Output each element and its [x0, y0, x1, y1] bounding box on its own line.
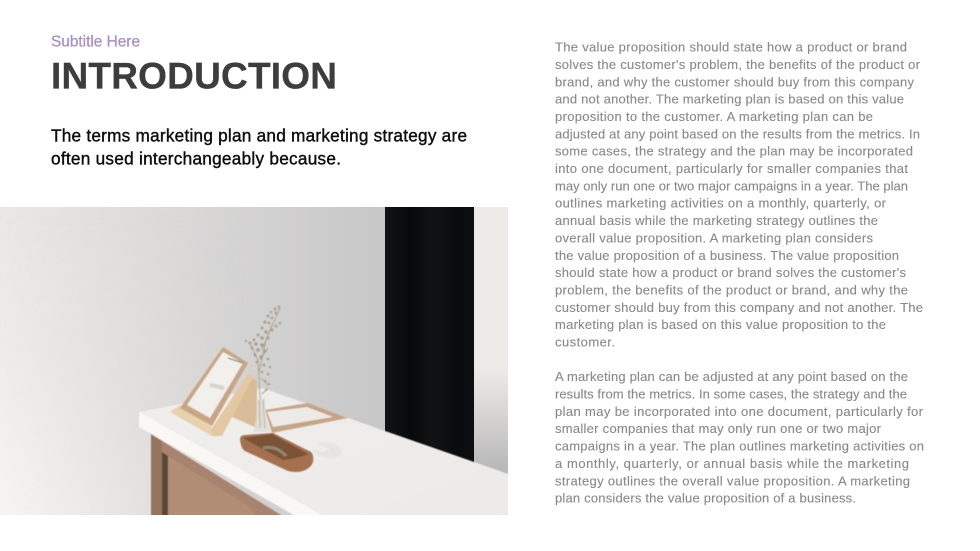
body text: first paragraph: solves the customer's problem, the benefits of the product or: [555, 57, 921, 72]
body text: first paragraph: proposition to the customer. A marketing plan can be: [555, 109, 873, 124]
body text: second paragraph: A marketing plan can be adjusted at any point based on the: [555, 369, 908, 384]
lead statement: [51, 126, 467, 169]
title: INTRODUCTION: [51, 55, 337, 96]
photo wall: [0, 207, 385, 515]
body text: first paragraph: outlines marketing activities on a monthly, quarterly, or: [555, 196, 887, 211]
body text: second paragraph: smaller companies that may only run one or two major: [555, 421, 882, 436]
body text: first paragraph: into one document, particularly for smaller companies that: [555, 161, 908, 176]
body text: first paragraph: [555, 40, 923, 349]
photo black curtain: [385, 207, 474, 467]
body text: first paragraph: and not another. The marketing plan is based on this value: [555, 92, 904, 107]
body text: first paragraph: annual basis while the marketing strategy outlines the: [555, 213, 878, 228]
lead statement: often used interchangeably because.: [51, 149, 341, 169]
subtitle: Subtitle Here: [51, 34, 140, 50]
body text: second paragraph: plan considers the value proposition of a business.: [555, 491, 856, 506]
body text: first paragraph: The value proposition should state how a product or brand: [555, 40, 907, 55]
photo wooden tray: [240, 433, 343, 472]
body text: first paragraph: customer.: [555, 334, 615, 350]
body text: second paragraph: a monthly, quarterly, or annual basis while the marketing: [555, 456, 909, 471]
body text: first paragraph: brand, and why the customer should buy from this company: [555, 74, 914, 89]
body text: first paragraph: customer should buy from this company and not another. The: [555, 300, 923, 315]
photo standing frame: [170, 347, 257, 436]
lead statement: The terms marketing plan and marketing strategy are: [51, 126, 467, 146]
photo: white counter with frames and plant: [0, 207, 520, 530]
body text: first paragraph: should state how a product or brand solves the customer's: [555, 265, 906, 280]
body text: second paragraph: plan may be incorporated into one document, particularly for: [555, 404, 924, 419]
body text: first paragraph: overall value proposition. A marketing plan considers: [555, 230, 874, 245]
body text: second paragraph: results from the metrics. In some cases, the strategy and the: [555, 386, 907, 402]
body text: first paragraph: adjusted at any point based on the results from the metrics. In: [555, 126, 920, 141]
body text: first paragraph: may only run one or two major campaigns in a year. The plan: [555, 178, 908, 193]
photo plant in vase: [245, 306, 281, 432]
body text: second paragraph: strategy outlines the overall value proposition. A marketing: [555, 473, 910, 488]
body text: first paragraph: problem, the benefits of the product or brand, and why the: [555, 282, 908, 298]
body text: first paragraph: some cases, the strategy and the plan may be incorporated: [555, 144, 913, 159]
photo right wall strip: [474, 207, 508, 477]
photo counter: [138, 388, 508, 515]
body text: first paragraph: marketing plan is based on this value proposition to the: [555, 317, 886, 332]
body text: first paragraph: the value proposition of a business. The value proposition: [555, 248, 899, 263]
photo flat card on counter: [265, 403, 348, 433]
body text: second paragraph: [555, 369, 924, 506]
body text: second paragraph: campaigns in a year. The plan outlines marketing activities on: [555, 439, 924, 454]
